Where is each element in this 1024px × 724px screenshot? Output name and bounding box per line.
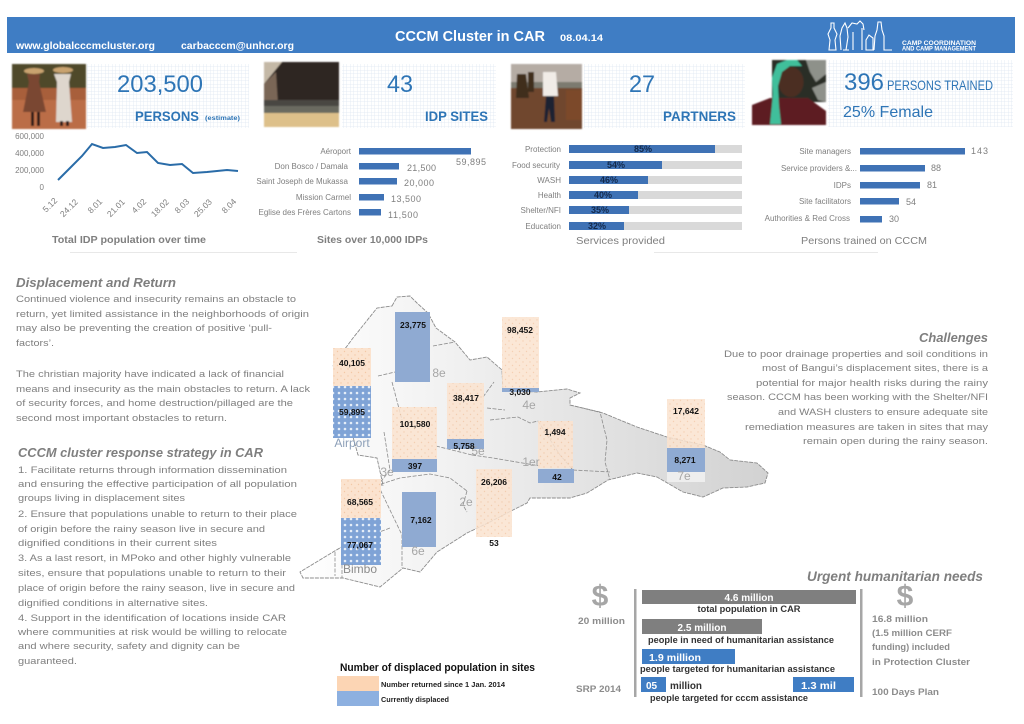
district: 4e: 98,452 bbox=[507, 325, 533, 335]
district: 2e bbox=[459, 469, 512, 548]
challenges paragraph: season. CCCM has been working with the Shelter/NFI bbox=[727, 392, 988, 403]
logo text: AND CAMP MANAGEMENT bbox=[902, 46, 976, 52]
y axis labels bbox=[15, 132, 45, 192]
funding note bbox=[872, 614, 970, 668]
district: 5e: 5e bbox=[471, 444, 485, 458]
chart title: Sites over 10,000 IDPs bbox=[317, 235, 428, 246]
panel: partners bbox=[511, 64, 745, 129]
district: 5e: 5,758 bbox=[453, 441, 475, 451]
site values: 13,500 bbox=[391, 194, 421, 204]
paragraph 2: The christian majority have indicated a lack of financial bbox=[16, 369, 284, 380]
x axis labels: 24.12 bbox=[58, 197, 80, 219]
strategy list: and where security, safety and dignity can be bbox=[18, 641, 240, 652]
district: Airport: Airport bbox=[334, 436, 370, 450]
bar: total population bbox=[642, 590, 856, 614]
y axis labels: 600,000 bbox=[15, 132, 45, 141]
district: 6e bbox=[402, 492, 436, 558]
district: Airport: 40,105 bbox=[339, 358, 365, 368]
site labels: Mission Carmel bbox=[296, 193, 351, 202]
district: 5e: 38,417 bbox=[453, 393, 479, 403]
strategy list: groups living in displacement sites bbox=[18, 493, 185, 504]
service percentages: 32% bbox=[588, 221, 606, 231]
site values bbox=[388, 157, 486, 220]
x axis labels: 18.02 bbox=[149, 197, 171, 219]
site values: 59,895 bbox=[456, 157, 486, 167]
chart title: Total IDP population over time bbox=[52, 235, 206, 246]
bar: CCCM targeted: people targeted for cccm assistance bbox=[650, 693, 808, 703]
trainee labels: Authorities & Red Cross bbox=[765, 214, 850, 223]
district: Airport bbox=[333, 348, 371, 450]
icon: dollar left: $ bbox=[592, 580, 609, 613]
funding note: in Protection Cluster bbox=[872, 657, 970, 668]
district boundaries bbox=[335, 342, 610, 578]
district: 5e bbox=[447, 383, 485, 458]
caption: partners: PARTNERS bbox=[663, 108, 736, 124]
strategy list: dignified conditions in their current sites bbox=[18, 538, 217, 549]
district: 8e bbox=[395, 312, 446, 382]
site labels: Eglise des Frères Cartons bbox=[259, 208, 351, 217]
site labels: Aéroport bbox=[320, 147, 352, 156]
legend: returned bbox=[337, 676, 505, 691]
district: 1er bbox=[522, 421, 574, 483]
legend: returned: Number returned since 1 Jan. 2014 bbox=[381, 682, 505, 689]
y axis labels: 400,000 bbox=[15, 149, 45, 158]
x axis labels: 21.01 bbox=[105, 197, 127, 219]
strategy list: of origin before the rainy season live in secure and bbox=[18, 524, 265, 535]
bar chart: services provided bbox=[512, 144, 742, 247]
service percentages: 54% bbox=[607, 160, 625, 170]
service labels: WASH bbox=[537, 176, 561, 185]
district: Airport: 59,895 bbox=[339, 407, 365, 417]
strategy list: guaranteed. bbox=[18, 656, 77, 667]
district: 3e bbox=[380, 407, 437, 479]
district: 7e bbox=[667, 399, 705, 483]
date: 08.04.14 bbox=[560, 33, 604, 44]
district: 1er: 42 bbox=[552, 472, 562, 482]
bar: CCCM targeted: 05 bbox=[646, 681, 658, 692]
challenges paragraph: remain open during the rainy season. bbox=[803, 436, 988, 447]
trainee labels: Site managers bbox=[799, 147, 851, 156]
logo text: CAMP COORDINATION bbox=[902, 40, 976, 47]
trainee values: 88 bbox=[931, 163, 941, 173]
bar: total population: 4.6 million bbox=[725, 593, 773, 604]
funding note: funding) included bbox=[872, 642, 950, 653]
text block: challenges bbox=[724, 330, 989, 447]
paragraph 1: factors’. bbox=[16, 338, 54, 349]
trainee values bbox=[889, 146, 988, 224]
trainee labels: Site facilitators bbox=[799, 197, 851, 206]
bar: CCCM targeted bbox=[641, 677, 854, 703]
paragraph 2 bbox=[16, 369, 310, 424]
map outline bbox=[300, 296, 768, 587]
district: 3e: 3e bbox=[380, 465, 394, 479]
photo: partners on site bbox=[511, 64, 582, 129]
service labels bbox=[512, 145, 561, 231]
chart title: Services provided bbox=[576, 236, 665, 247]
district: 7e: 7e bbox=[677, 469, 691, 483]
bar: total population: total population in CAR bbox=[698, 604, 801, 614]
service labels: Education bbox=[525, 222, 561, 231]
stat: 25% female: 25% Female bbox=[843, 104, 933, 121]
chart title: Persons trained on CCCM bbox=[801, 236, 927, 247]
stat: 27: 27 bbox=[629, 71, 655, 98]
district: 6e: 7,162 bbox=[410, 515, 432, 525]
district: 7e: 17,642 bbox=[673, 406, 699, 416]
service percentages: 46% bbox=[600, 175, 618, 185]
site labels: Don Bosco / Damala bbox=[275, 162, 349, 171]
district: 7e: 8,271 bbox=[674, 455, 696, 465]
label: SRP 2014: SRP 2014 bbox=[576, 684, 622, 695]
caption: persons trained: PERSONS TRAINED bbox=[887, 77, 993, 93]
service labels: Protection bbox=[525, 145, 561, 154]
district: 2e: 53 bbox=[489, 538, 499, 548]
strategy list: place of origin before the rainy season, live in secure and bbox=[18, 583, 295, 594]
icon: dollar right: $ bbox=[897, 580, 914, 613]
service percentages: 35% bbox=[591, 205, 609, 215]
site values: 20,000 bbox=[404, 178, 434, 188]
strategy list: dignified conditions in alternative sites. bbox=[18, 598, 208, 609]
paragraph 1: Continued violence and insecurity remains an obstacle to bbox=[16, 294, 296, 305]
site labels: Saint Joseph de Mukassa bbox=[256, 177, 349, 186]
panel: persons trained bbox=[752, 60, 1013, 127]
email: carbacccm@unhcr.org bbox=[181, 41, 294, 52]
district: 6e: 6e bbox=[411, 544, 425, 558]
label: 100 days plan: 100 Days Plan bbox=[872, 687, 939, 698]
challenges paragraph: potential for major health risks during the rainy bbox=[756, 378, 988, 389]
caption: IDP sites: IDP SITES bbox=[425, 108, 488, 124]
x axis labels bbox=[40, 195, 238, 219]
strategy list: 1. Facilitate returns through information dissemination bbox=[18, 465, 287, 476]
strategy list: 4. Support in the identification of locations inside CAR bbox=[18, 613, 286, 624]
heading: Displacement and Return bbox=[16, 275, 176, 290]
icon: CCCM logo bbox=[828, 21, 892, 50]
panel: IDP sites bbox=[264, 62, 496, 128]
service labels: Food security bbox=[512, 161, 560, 170]
district: 1er: 1,494 bbox=[544, 427, 566, 437]
y axis labels: 0 bbox=[40, 183, 45, 192]
strategy list: where communities at risk would be willing to relocate bbox=[17, 627, 287, 638]
site values: 11,500 bbox=[388, 210, 418, 220]
caption: persons: PERSONS bbox=[135, 108, 199, 124]
stat: 43: 43 bbox=[387, 71, 413, 98]
bar: CCCM targeted: 1.3 mil bbox=[801, 681, 836, 692]
paragraph 2: of security forces, and home destruction/pillaged are the bbox=[16, 398, 293, 409]
title: CCCM Cluster in CAR bbox=[395, 29, 546, 45]
strategy list: sites, ensure that populations unable to return to their bbox=[18, 568, 286, 579]
service percentages: 40% bbox=[594, 190, 612, 200]
bar: CCCM targeted: million bbox=[670, 681, 702, 692]
paragraph 1: return, yet limited assistance in the neighborhoods of origin bbox=[16, 309, 309, 320]
trainee labels bbox=[765, 147, 857, 223]
strategy list: and ensuring the effective participation of all population bbox=[18, 479, 297, 490]
district: 2e: 26,206 bbox=[481, 477, 507, 487]
x axis labels: 8.03 bbox=[172, 196, 191, 215]
paragraph 1 bbox=[16, 294, 309, 349]
x axis labels: 25.03 bbox=[192, 197, 214, 219]
heading: Challenges bbox=[919, 330, 988, 345]
website link: www.globalcccmcluster.org bbox=[15, 41, 155, 52]
district: 4e: 4e bbox=[522, 398, 536, 412]
bar: people targeted: people targeted for humanitarian assistance bbox=[640, 664, 835, 674]
note: estimate: (estimate) bbox=[205, 115, 240, 122]
text block: response strategy bbox=[17, 445, 297, 667]
bar chart: sites over 10,000 IDPs bbox=[256, 147, 486, 246]
heading: CCCM cluster response strategy in CAR bbox=[18, 445, 264, 460]
paragraph 2: second most important obstacles to return. bbox=[16, 413, 227, 424]
service labels: Health bbox=[538, 191, 561, 200]
trainee labels: IDPs bbox=[834, 181, 851, 190]
bar: people targeted: 1.9 million bbox=[649, 653, 701, 664]
map: Bangui districts bbox=[300, 296, 768, 587]
site values: 21,500 bbox=[407, 163, 436, 173]
challenges paragraph bbox=[724, 349, 989, 447]
photo: shelter hangar bbox=[264, 62, 339, 127]
legend title: Number of displaced population in sites bbox=[340, 662, 535, 674]
legend: displaced bbox=[337, 691, 449, 706]
stat: 203,500: 203,500 bbox=[117, 71, 203, 98]
legend: displaced: Currently displaced bbox=[381, 697, 449, 704]
bar chart: persons trained on CCCM bbox=[765, 146, 988, 247]
strategy list bbox=[17, 465, 297, 667]
service percentages: 85% bbox=[634, 144, 652, 154]
strategy list: 3. As a last resort, in MPoko and other highly vulnerable bbox=[18, 553, 291, 564]
x axis labels: 4.02 bbox=[129, 196, 148, 215]
population line bbox=[58, 144, 238, 180]
x axis labels: 5.12 bbox=[40, 195, 59, 214]
y axis labels: 200,000 bbox=[15, 166, 45, 175]
logo text bbox=[902, 40, 976, 52]
service percentages bbox=[588, 144, 652, 231]
x axis labels: 8.01 bbox=[85, 196, 104, 215]
line chart: total IDP population bbox=[15, 132, 238, 246]
district: 2e: 2e bbox=[459, 495, 473, 509]
challenges paragraph: most of Bangui’s displacement sites, there is a bbox=[762, 363, 989, 374]
challenges paragraph: and WASH clusters to ensure adequate site bbox=[778, 407, 988, 418]
photo: women carrying loads bbox=[12, 64, 86, 129]
district: 4e: 3,030 bbox=[509, 387, 531, 397]
text block: displacement and return bbox=[16, 275, 310, 424]
strategy list: 2. Ensure that populations unable to return to their place bbox=[18, 509, 297, 520]
trainee values: 54 bbox=[906, 197, 916, 207]
panel: urgent humanitarian needs bbox=[576, 569, 983, 703]
district: Bimbo: 68,565 bbox=[347, 497, 373, 507]
trainee labels: Service providers &... bbox=[781, 164, 857, 173]
service labels: Shelter/NFI bbox=[521, 206, 561, 215]
bar: people in need: people in need of humanitarian assistance bbox=[648, 635, 834, 645]
bar: people in need: 2.5 million bbox=[678, 623, 726, 634]
funding note: (1.5 million CERF bbox=[872, 628, 952, 639]
district: 8e: 8e bbox=[432, 366, 446, 380]
district: 3e: 101,580 bbox=[400, 419, 431, 429]
header band bbox=[7, 17, 1015, 53]
challenges paragraph: Due to poor drainage properties and soil conditions in bbox=[724, 349, 988, 360]
legend bbox=[337, 662, 535, 706]
district: 1er: 1er bbox=[522, 455, 540, 469]
photo: woman with green headscarf bbox=[752, 60, 826, 125]
funding: 20 million: 20 million bbox=[578, 616, 625, 627]
bar: people in need bbox=[642, 619, 834, 645]
funding note: 16.8 million bbox=[872, 614, 928, 625]
x axis labels: 8.04 bbox=[219, 196, 238, 215]
trainee values: 143 bbox=[971, 146, 988, 156]
panel: persons bbox=[12, 64, 249, 129]
stat: 396: 396 bbox=[844, 69, 884, 96]
trainee values: 30 bbox=[889, 214, 899, 224]
paragraph 1: may also be preventing the creation of positive ‘pull- bbox=[16, 323, 272, 334]
district: 3e: 397 bbox=[408, 461, 422, 471]
district: 8e: 23,775 bbox=[400, 320, 426, 330]
district: Bimbo: Bimbo bbox=[343, 562, 377, 576]
paragraph 2: means and insecurity as the main obstacles to return. A lack bbox=[16, 384, 310, 395]
district: Bimbo: 77,067 bbox=[347, 540, 373, 550]
challenges paragraph: remediation measures are taken in sites that may bbox=[745, 422, 988, 433]
heading: Urgent humanitarian needs bbox=[807, 569, 983, 584]
site labels bbox=[256, 147, 352, 217]
bar: people targeted bbox=[640, 649, 835, 674]
district: Bimbo bbox=[341, 479, 381, 576]
trainee values: 81 bbox=[927, 180, 937, 190]
district: 4e bbox=[502, 317, 539, 412]
